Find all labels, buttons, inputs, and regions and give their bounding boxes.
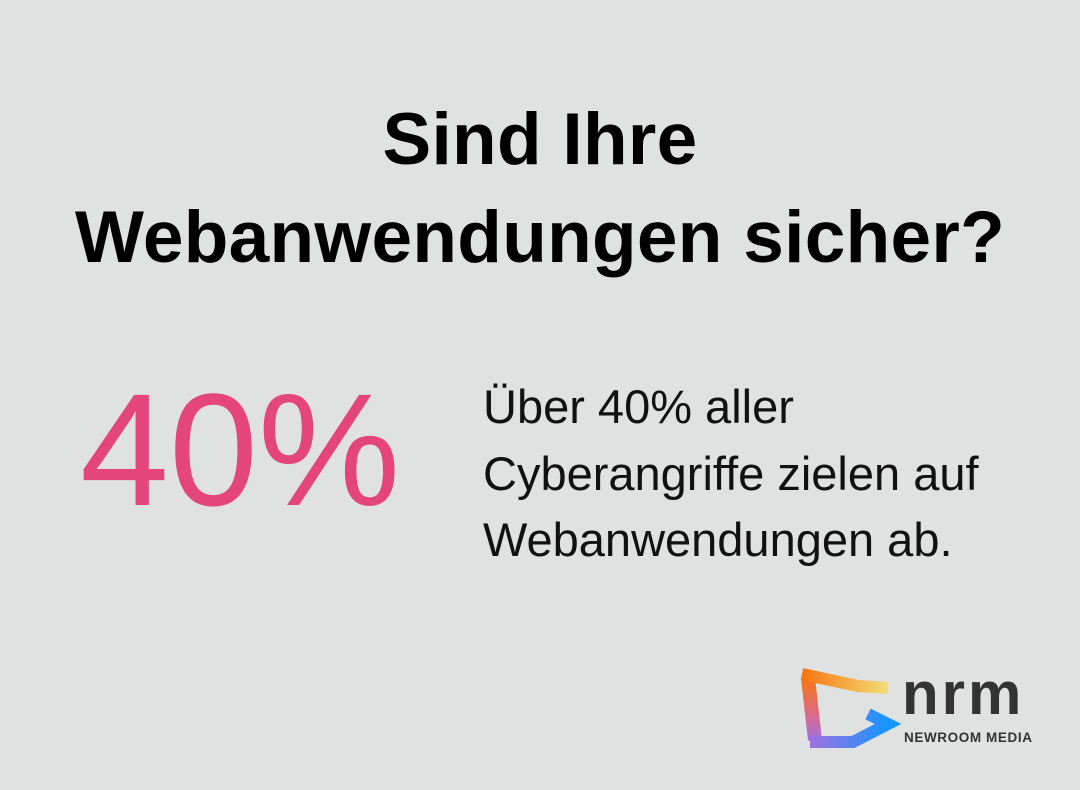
description text — [483, 380, 979, 566]
title — [75, 99, 1005, 278]
description text: Webanwendungen ab. — [483, 513, 953, 566]
icon: logo mark — [800, 668, 902, 748]
logo wordmark: nrm — [902, 660, 1024, 727]
title: Webanwendungen sicher? — [75, 197, 1005, 278]
logo: NEWROOM MEDIA — [904, 730, 1033, 745]
description text: Über 40% aller — [483, 380, 794, 433]
logo — [800, 660, 1033, 748]
description text: Cyberangriffe zielen auf — [483, 447, 979, 500]
big stat 40%: 40% — [80, 360, 400, 539]
title: Sind Ihre — [382, 99, 698, 180]
